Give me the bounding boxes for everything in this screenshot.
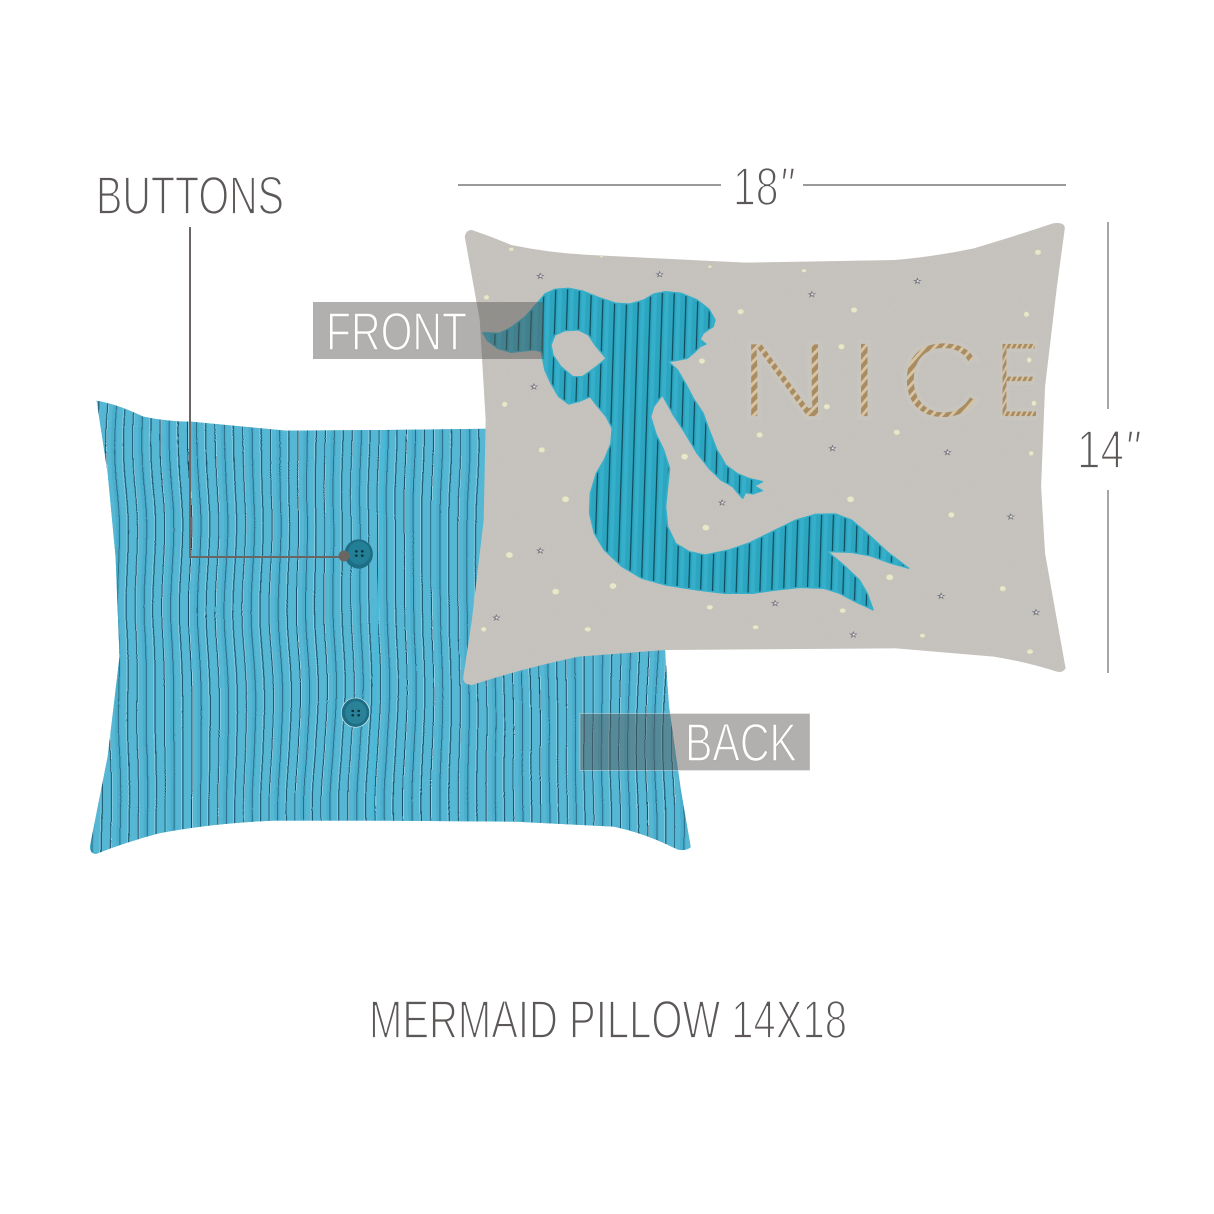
buttons callout leader line bbox=[190, 227, 350, 562]
embroidered word NICE: I bbox=[849, 319, 880, 442]
back label bbox=[580, 713, 810, 773]
back pillow bbox=[90, 400, 691, 854]
embroidered word NICE: E bbox=[996, 320, 1040, 442]
button placket seam bbox=[373, 431, 384, 821]
front pillow bbox=[463, 223, 1066, 685]
button: upper bbox=[344, 539, 373, 569]
mermaid applique bbox=[476, 283, 915, 617]
buttons label: BUTTONS bbox=[96, 166, 284, 226]
felt body bbox=[463, 223, 1066, 685]
title: MERMAID PILLOW 14X18 bbox=[369, 990, 847, 1050]
embroidered word NICE: C bbox=[899, 319, 982, 441]
pearl beads bbox=[481, 248, 1041, 654]
button: lower bbox=[341, 698, 370, 727]
embroidered word NICE bbox=[738, 319, 1040, 442]
striped fabric bbox=[90, 400, 691, 854]
width dimension 18 inches: 18" bbox=[733, 157, 795, 217]
front label: FRONT bbox=[326, 302, 467, 362]
embroidered word NICE: N bbox=[738, 319, 831, 442]
silver star beads bbox=[492, 271, 1040, 638]
back label: BACK bbox=[685, 713, 797, 773]
height dimension 14 inches: 14" bbox=[1077, 420, 1141, 480]
